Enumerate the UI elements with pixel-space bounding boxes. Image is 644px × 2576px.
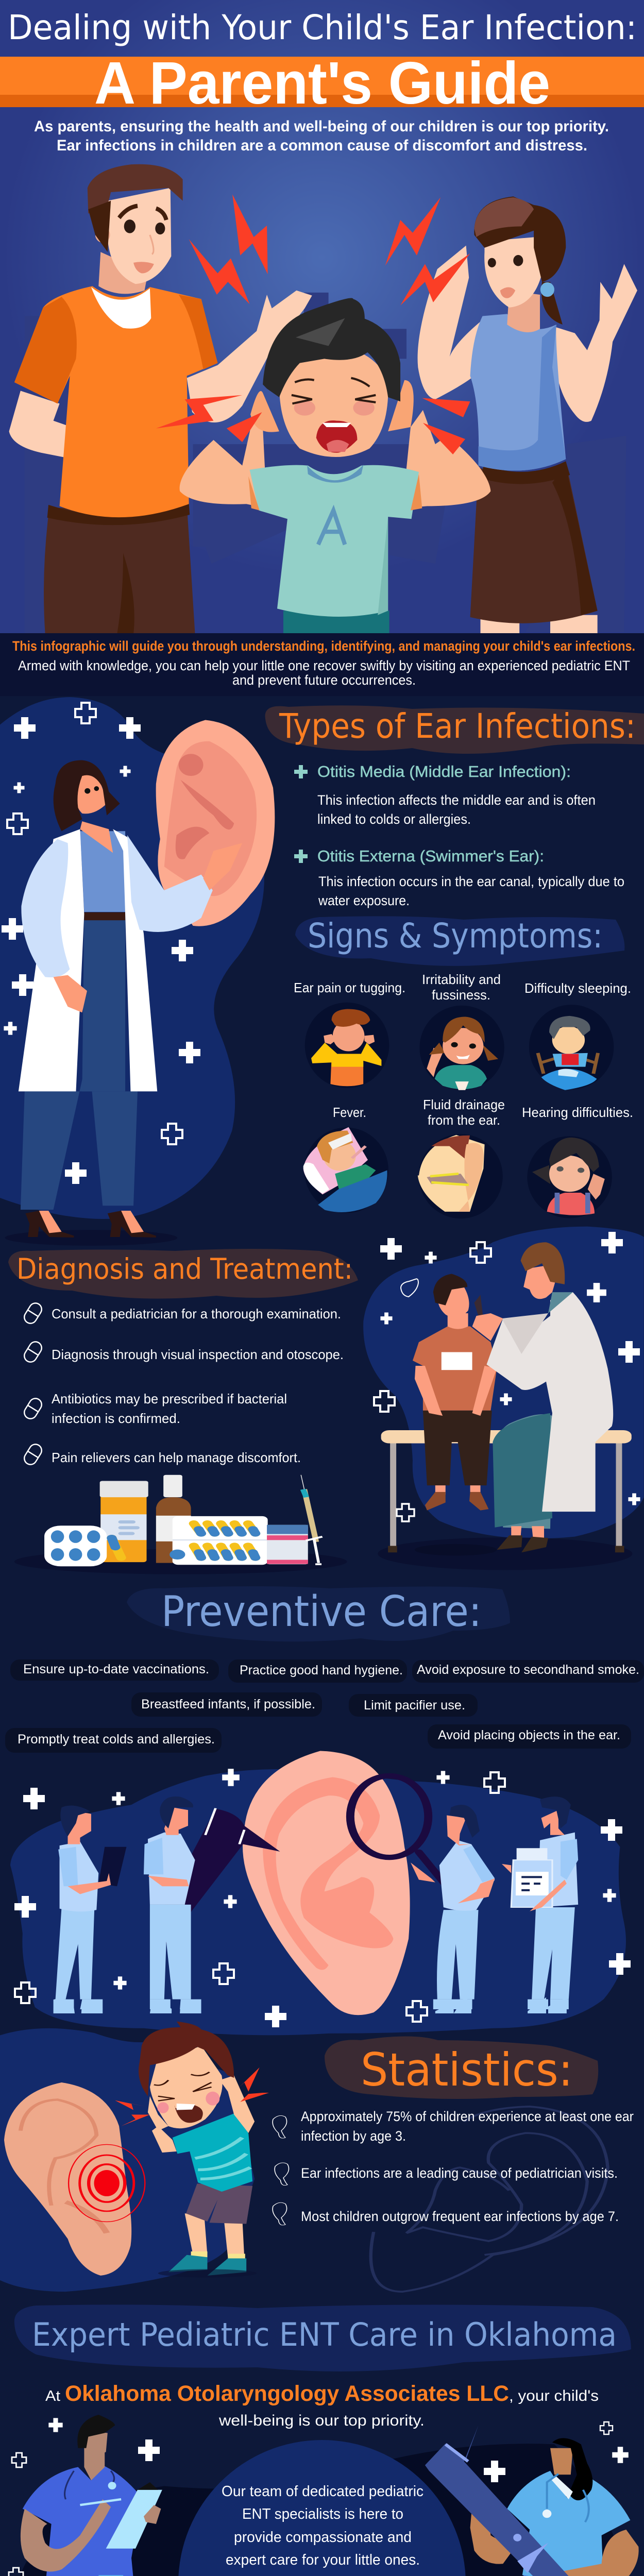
heading: diagnosis and treatment: Diagnosis and Treatment: — [16, 1252, 353, 1285]
intro text: As parents, ensuring the health and well-being of our children is our top priority. — [34, 118, 609, 135]
panel: expert pediatric ENT care — [0, 2304, 644, 2576]
practice intro: Oklahoma Otolaryngology Associates LLC — [65, 2381, 509, 2406]
treatment list: Diagnosis through visual inspection and otoscope. — [52, 1347, 344, 1362]
illustration: medications — [14, 1475, 347, 1574]
practice intro: , your child's — [509, 2387, 599, 2404]
heading: statistics: Statistics: — [361, 2043, 573, 2096]
care circle text: expert care for your little ones. — [226, 2552, 420, 2568]
symptom labels: from the ear. — [428, 1112, 500, 1128]
symptom labels: Ear pain or tugging. — [294, 980, 405, 995]
medical plus decorations — [2, 703, 640, 2576]
treatment list: Antibiotics may be prescribed if bacterial — [52, 1391, 287, 1406]
symptom labels — [294, 972, 633, 1128]
shoes continuation — [54, 1997, 567, 2013]
doctor — [19, 760, 242, 1210]
orange title band: A Parent's Guide — [94, 49, 550, 116]
statistics list: infection by age 3. — [301, 2128, 406, 2144]
symptom labels: Irritability and — [422, 972, 501, 987]
hero illustration: worried parents and crying child — [9, 164, 637, 634]
otitis externa: water exposure. — [318, 893, 410, 908]
prevention tips — [5, 1659, 644, 1753]
symptom labels: Fluid drainage — [423, 1097, 505, 1112]
panel: preventive care — [5, 1586, 644, 2035]
intro text — [34, 118, 609, 154]
icons: stat ear bullets — [273, 2115, 289, 2225]
watermark ear — [371, 2107, 608, 2292]
large ear — [243, 1751, 410, 2015]
care circle text: ENT specialists is here to — [242, 2506, 403, 2522]
otoscope — [150, 1808, 280, 1947]
icon: child with fever — [303, 1127, 388, 1213]
nurse with bottle — [502, 1797, 578, 2009]
symptom labels: fussiness. — [432, 987, 490, 1003]
otitis media: This infection affects the middle ear and is often — [317, 792, 596, 808]
panel: diagnosis and treatment — [5, 1211, 644, 1574]
otitis externa — [294, 847, 624, 908]
pain target rings — [69, 2144, 145, 2222]
otitis media: linked to colds or allergies. — [317, 811, 471, 827]
nurse with clipboard — [54, 1805, 126, 2009]
prevention tips: Limit pacifier use. — [364, 1698, 465, 1713]
crying child — [180, 298, 490, 634]
otitis externa: Otitis Externa (Swimmer's Ear): — [317, 847, 544, 865]
heading: statistics — [325, 2036, 598, 2099]
heart icon — [401, 1279, 418, 1297]
doctor shadow and heeled shoes — [5, 1211, 177, 1246]
prevention tips: Avoid exposure to secondhand smoke. — [417, 1663, 639, 1677]
illustration: doctor with otoscope — [425, 2426, 639, 2576]
care circle text — [178, 2440, 466, 2576]
practice intro: well-being is our top priority. — [218, 2412, 425, 2429]
illustration: child with ear pain — [0, 2022, 608, 2292]
statistics list: Most children outgrow frequent ear infections by age 7. — [301, 2209, 619, 2224]
practice intro — [45, 2381, 599, 2429]
icon: irritable girl — [419, 1006, 504, 1090]
panel: types of ear infections — [265, 705, 644, 908]
panel: statistics — [0, 2022, 634, 2292]
nurse with otoscope — [144, 1797, 201, 2009]
boy — [139, 2022, 257, 2277]
treatment list: Consult a pediatrician for a thorough examination. — [52, 1306, 341, 1321]
father — [9, 164, 312, 634]
heading: expert pediatric ENT care in Oklahoma: Expert Pediatric ENT Care in Oklahoma — [32, 2316, 617, 2353]
treatment list: Pain relievers can help manage discomfort. — [52, 1450, 301, 1465]
ear — [156, 720, 275, 926]
symptom labels: Fever. — [333, 1105, 366, 1120]
intro text: Ear infections in children are a common cause of discomfort and distress. — [57, 137, 587, 154]
illustration: doctor pointing at large ear — [0, 697, 275, 1219]
prevention tips: Avoid placing objects in the ear. — [438, 1728, 620, 1742]
pain lightning bolts — [156, 194, 470, 454]
otitis externa: This infection occurs in the ear canal, typically due to — [318, 874, 624, 889]
statistics list: Ear infections are a leading cause of pediatrician visits. — [301, 2165, 618, 2181]
intro band: guide summary — [0, 633, 644, 696]
icon: child in bed — [529, 1005, 614, 1090]
treatment list — [22, 1301, 344, 1467]
heading: diagnosis and treatment — [8, 1249, 358, 1299]
treatment list: infection is confirmed. — [52, 1411, 180, 1426]
symptom labels: Hearing difficulties. — [522, 1105, 633, 1120]
statistics list — [301, 2109, 634, 2224]
mother — [418, 196, 637, 634]
otitis media: Otitis Media (Middle Ear Infection): — [317, 762, 571, 781]
prevention tips: Ensure up-to-date vaccinations. — [23, 1662, 209, 1676]
panel: signs and symptoms — [294, 916, 633, 1218]
heading: preventive care: Preventive Care: — [161, 1587, 482, 1636]
prevention tips: Promptly treat colds and allergies. — [18, 1732, 215, 1747]
practice intro: At — [45, 2388, 60, 2404]
heading: expert pediatric ENT care in Oklahoma — [14, 2304, 631, 2371]
prevention tips: Breastfeed infants, if possible. — [141, 1697, 315, 1711]
illustration: doctor with clipboard — [21, 2415, 162, 2576]
nurse with magnifier — [411, 1805, 495, 2009]
heading: signs and symptoms: Signs & Symptoms: — [308, 916, 603, 956]
care circle text: provide compassionate and — [234, 2529, 412, 2546]
icon: hearing difficulty girl — [527, 1136, 612, 1218]
care circle text: Our team of dedicated pediatric — [222, 2483, 423, 2500]
dark lower background — [0, 2444, 644, 2576]
icon: ear fluid drainage — [418, 1134, 503, 1218]
icon: ear pain child — [305, 1003, 389, 1088]
intro band: guide summary: and prevent future occurrences. — [232, 672, 416, 688]
otitis media — [294, 762, 596, 827]
illustration: doctor examining boy — [363, 1227, 644, 1570]
prevention tips: Practice good hand hygiene. — [240, 1663, 403, 1677]
symptom labels: Difficulty sleeping. — [524, 980, 631, 996]
hero header panel — [0, 0, 644, 634]
illustration: medical team examining ear — [10, 1751, 626, 2035]
magnifying glass — [350, 1776, 466, 1910]
